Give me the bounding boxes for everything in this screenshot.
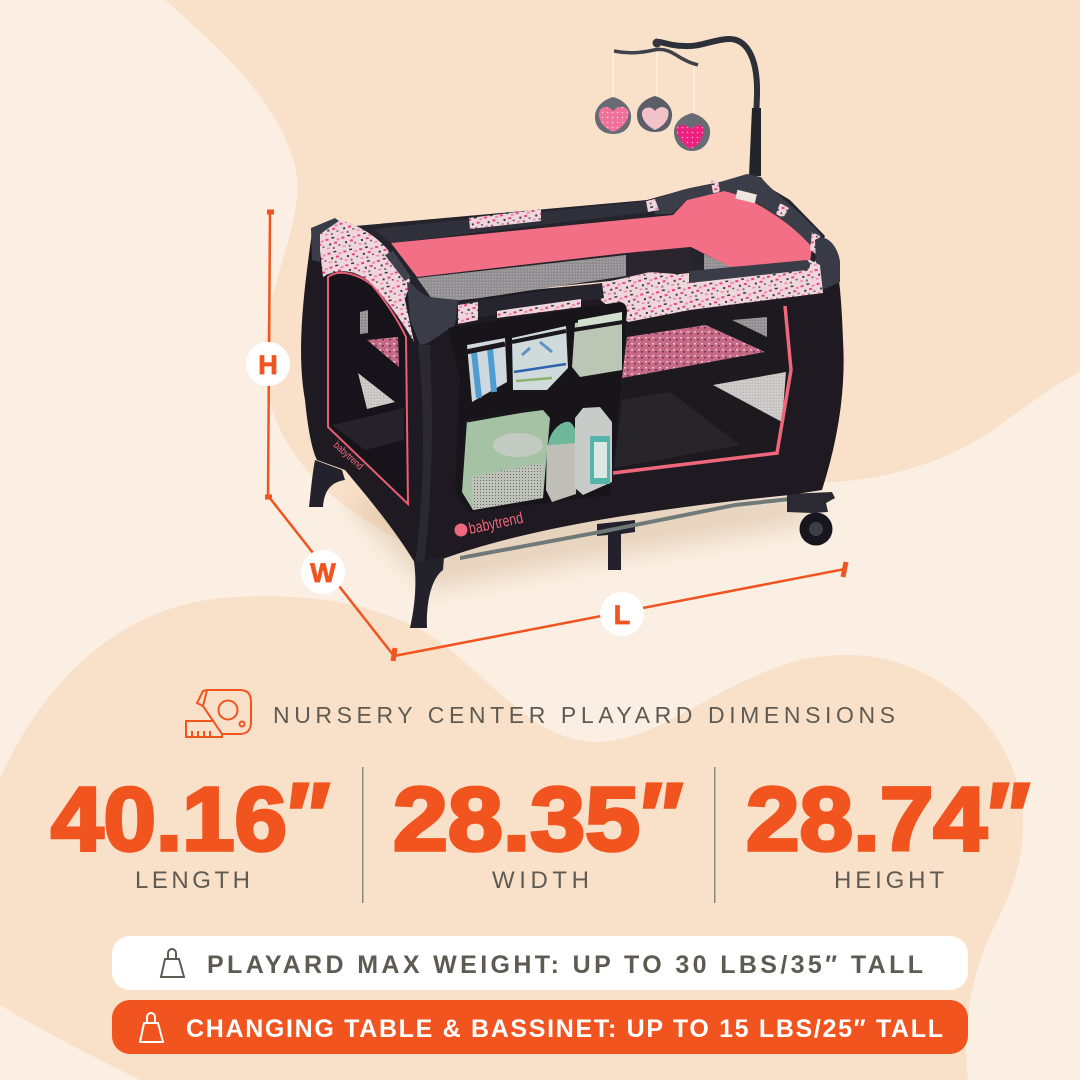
floor shadow xyxy=(345,490,825,590)
mobile toy: heart 2 xyxy=(637,96,672,132)
dimension lines xyxy=(246,212,846,661)
front corner foot xyxy=(410,557,444,628)
lower support bar xyxy=(460,497,790,560)
stat: length xyxy=(51,766,330,894)
pink back fabric xyxy=(391,191,812,277)
icon: weight xyxy=(140,1013,163,1042)
width value: 28.35 xyxy=(393,770,640,870)
playard illustration xyxy=(301,38,844,628)
mattress mesh floor xyxy=(417,255,626,303)
body of playard xyxy=(301,232,844,563)
left floral end panel xyxy=(318,220,414,342)
back left foot xyxy=(309,460,345,507)
far grey mesh xyxy=(704,254,731,272)
front floral band xyxy=(598,260,823,322)
height line: H xyxy=(258,350,278,380)
front window xyxy=(613,306,791,473)
divider xyxy=(714,767,716,903)
pocket: sippy bottle xyxy=(546,422,577,502)
bar: changing table and bassinet xyxy=(112,1000,968,1054)
mobile arm xyxy=(613,38,761,176)
babytrend logo front xyxy=(454,510,525,538)
dark backing behind rails xyxy=(355,176,825,300)
stat: height xyxy=(746,766,1030,894)
height value: ″ xyxy=(988,766,1030,866)
height label: HEIGHT xyxy=(834,867,944,894)
width line xyxy=(269,497,394,656)
pocket: blue stripes xyxy=(466,338,507,402)
wheel assembly xyxy=(787,492,835,546)
front left corner floral xyxy=(458,302,478,324)
mobile toy: heart 1 xyxy=(595,97,631,134)
heading: NURSERY CENTER PLAYARD DIMENSIONS xyxy=(273,702,895,728)
babytrend logo side: babytrend xyxy=(331,440,365,472)
rail floral clips xyxy=(646,180,820,254)
back rail xyxy=(373,201,650,243)
dark far opening xyxy=(626,247,693,276)
pocket: diaper xyxy=(512,326,568,390)
length label: LENGTH xyxy=(135,867,250,894)
right corner block xyxy=(815,238,840,290)
length value: ″ xyxy=(288,766,330,866)
icon: weight xyxy=(161,949,184,977)
front right grey bar xyxy=(689,260,810,283)
height line xyxy=(246,212,290,497)
top left corner post xyxy=(311,218,339,262)
bar: changing table and bassinet: CHANGING TABLE & BASSINET: UP TO 15 LBS/25″ TALL xyxy=(186,1015,943,1043)
height value: 28.74 xyxy=(746,770,987,870)
front rail floral strip xyxy=(497,299,581,318)
left side rail tube xyxy=(385,251,411,281)
width value: ″ xyxy=(641,766,683,866)
window trim xyxy=(613,306,791,473)
width line: W xyxy=(310,558,336,588)
middle support leg xyxy=(597,520,635,570)
width label: WIDTH xyxy=(492,867,589,894)
length line: L xyxy=(614,600,630,630)
left end window xyxy=(328,273,408,504)
front rail xyxy=(456,283,604,321)
babytrend logo front: babytrend xyxy=(467,510,525,538)
warning label xyxy=(735,190,757,203)
organizer backing xyxy=(448,302,627,512)
length line xyxy=(393,562,846,661)
front left corner block xyxy=(407,282,458,345)
icon: tape measure xyxy=(186,690,251,737)
pocket: green cloth xyxy=(572,312,623,377)
mobile toy: heart 3 xyxy=(674,113,710,151)
stat: width xyxy=(393,766,683,894)
pocket: wipes xyxy=(462,408,550,510)
divider xyxy=(362,767,364,903)
background blob: top peach xyxy=(165,0,1080,540)
bar: playard max weight: PLAYARD MAX WEIGHT: UP TO 30 LBS/35″ TALL xyxy=(207,951,923,979)
bar: playard max weight xyxy=(112,936,968,990)
organizer xyxy=(448,302,627,512)
front corner post xyxy=(415,345,432,563)
top right rail corner xyxy=(651,174,822,247)
pocket: lotion bottle xyxy=(575,407,612,495)
back rail floral sleeve xyxy=(469,209,541,229)
length value: 40.16 xyxy=(51,770,287,870)
background blob: bottom peach xyxy=(0,596,1023,1080)
